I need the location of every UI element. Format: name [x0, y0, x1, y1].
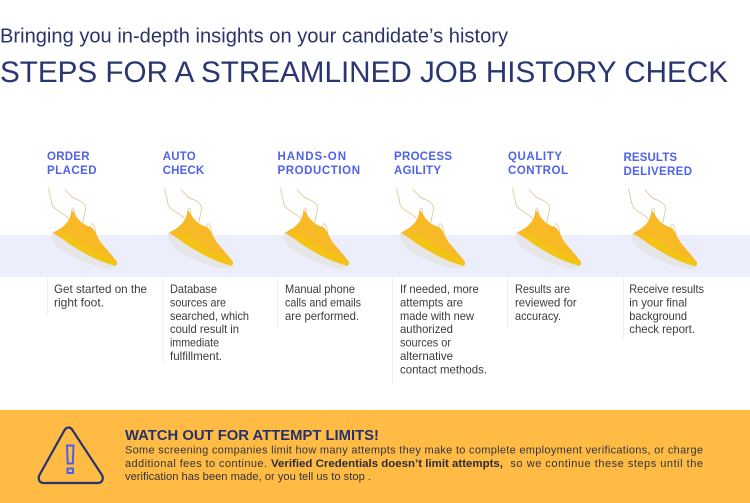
text: step 4 description [400, 283, 487, 376]
heading: process agility: PROCESS [394, 151, 452, 163]
heading: quality control: QUALITY [508, 151, 562, 163]
text: step 3 description: Manual phone [285, 283, 355, 296]
icon: warning triangle [39, 428, 103, 483]
panel: step 5 quality control [508, 151, 582, 328]
panel: warning banner [0, 410, 750, 503]
text: step 4 description: authorized [400, 323, 453, 336]
banner body text: Some screening companies limit how many attempts they make to complete employment verifications, or charge [125, 444, 703, 456]
panel: step 1 order placed [47, 151, 147, 317]
icon: yellow sneaker [164, 188, 234, 268]
icon: yellow sneaker [280, 188, 350, 268]
subtitle: Bringing you in-depth insights on your candidate’s history [0, 26, 508, 48]
heading: results delivered [624, 152, 692, 178]
heading: order placed: PLACED [47, 165, 96, 177]
banner heading: WATCH OUT FOR ATTEMPT LIMITS! [125, 428, 379, 444]
text: step 6 description: check report. [629, 323, 695, 336]
heading: hands-on production: HANDS-ON [278, 151, 346, 163]
banner body text [125, 444, 703, 483]
text: step 4 description: contact methods. [400, 363, 487, 376]
text: step 6 description: background [629, 310, 687, 323]
panel: step 4 process agility [392, 151, 487, 384]
text: step 1 description: Get started on the [54, 283, 147, 296]
text: step 2 description: Database [170, 283, 217, 296]
banner body text: so we continue these steps until the [510, 458, 703, 470]
text: step 2 description: could result in [170, 323, 239, 336]
title: STEPS FOR A STREAMLINED JOB HISTORY CHECK [0, 56, 728, 89]
text: step 5 description [515, 283, 577, 323]
heading: hands-on production: PRODUCTION [278, 165, 360, 177]
icon: yellow sneaker [628, 189, 698, 269]
text: step 4 description: If needed, more [400, 283, 479, 296]
heading: quality control [508, 151, 568, 177]
text: step 2 description: searched, which [170, 310, 249, 323]
heading: process agility: AGILITY [394, 165, 441, 177]
heading: results delivered: DELIVERED [624, 166, 692, 178]
panel: step 3 hands-on production [278, 151, 361, 328]
text: step 6 description: Receive results [629, 283, 704, 296]
heading: results delivered: RESULTS [624, 152, 677, 164]
lavender band [0, 235, 750, 277]
text: step 6 description [629, 283, 704, 336]
text: step 2 description: immediate [170, 337, 219, 350]
text: step 4 description: alternative [400, 350, 453, 363]
text: step 5 description: Results are [515, 283, 570, 296]
heading: auto check: AUTO [163, 151, 196, 163]
heading: process agility [394, 151, 452, 177]
heading: hands-on production [278, 151, 360, 177]
heading: order placed [47, 151, 96, 177]
text: step 6 description: in your final [629, 296, 687, 309]
panel: step 2 auto check [163, 151, 249, 365]
icon: yellow sneaker [396, 188, 466, 268]
banner body text: verification has been made, or you tell us to stop . [125, 471, 371, 483]
heading: order placed: ORDER [47, 151, 90, 163]
panel: step 6 results delivered [624, 152, 704, 341]
text: step 3 description [285, 283, 361, 323]
icon: yellow sneaker [48, 188, 117, 268]
banner body text: Verified Credentials doesn’t limit attempts, [271, 458, 503, 470]
icon: yellow sneaker [512, 188, 582, 268]
text: step 5 description: reviewed for [515, 296, 577, 309]
text: step 4 description: made with new [400, 310, 475, 323]
text: step 1 description: right foot. [54, 296, 104, 309]
heading: auto check [163, 151, 205, 177]
text: step 4 description: sources or [400, 337, 451, 350]
text: step 3 description: calls and emails [285, 296, 361, 309]
text: step 5 description: accuracy. [515, 310, 561, 323]
text: step 2 description [170, 283, 249, 363]
heading: quality control: CONTROL [508, 165, 568, 177]
banner body text: additional fees to continue. [125, 458, 267, 470]
text: step 3 description: are performed. [285, 310, 359, 323]
text: step 4 description: attempts are [400, 296, 463, 309]
text: step 2 description: fulfillment. [170, 350, 222, 363]
text: step 2 description: sources are [170, 296, 226, 309]
heading: auto check: CHECK [163, 165, 205, 177]
text: step 1 description [54, 283, 147, 309]
